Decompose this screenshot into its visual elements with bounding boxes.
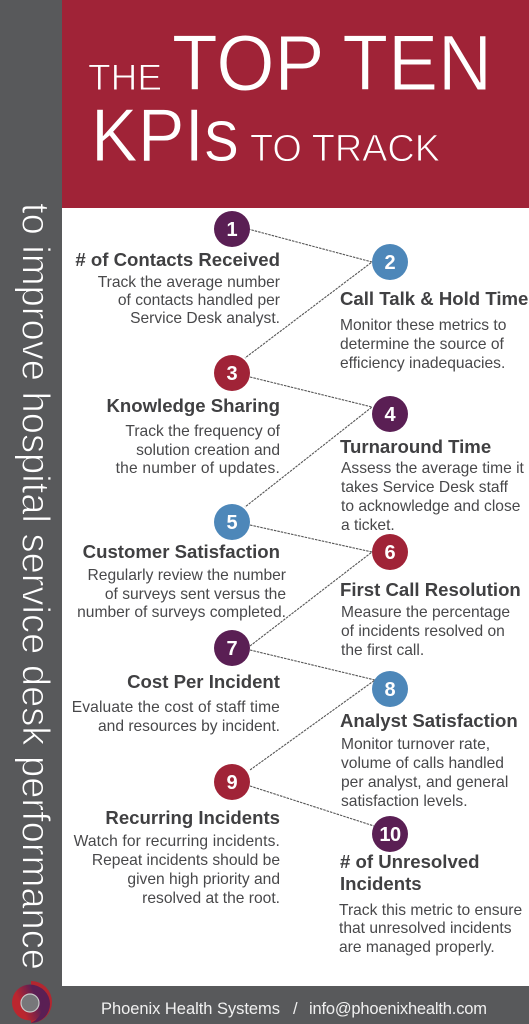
text 3 <box>116 423 281 477</box>
badge 2: 2 <box>384 252 396 274</box>
text 1: of contacts handled per <box>118 292 280 309</box>
text 2 <box>340 317 507 372</box>
footer text <box>101 1000 487 1018</box>
text 2: determine the source of <box>340 336 504 353</box>
heading 9: Recurring Incidents <box>105 807 280 828</box>
text 2: Monitor these metrics to <box>340 317 507 334</box>
badge 9: 9 <box>226 772 238 794</box>
heading 10: Incidents <box>340 873 422 894</box>
text 5: number of surveys completed. <box>77 604 286 621</box>
badge 6 <box>372 534 408 570</box>
badge 4 <box>372 396 408 432</box>
heading 3: Knowledge Sharing <box>106 395 280 416</box>
text 7 <box>72 699 280 735</box>
title banner <box>62 0 529 208</box>
badge 10: 10 <box>379 824 401 846</box>
text 10: are managed properly. <box>339 939 495 956</box>
text 5: of surveys sent versus the <box>105 586 286 603</box>
badge 6: 6 <box>384 542 396 564</box>
badge 5 <box>214 504 250 540</box>
text 7: Evaluate the cost of staff time <box>72 699 280 716</box>
text 10: Track this metric to ensure <box>339 902 522 919</box>
KPI 4 <box>340 396 525 534</box>
heading 1: # of Contacts Received <box>75 249 280 270</box>
KPI 2 <box>340 244 528 372</box>
text 6: Measure the percentage <box>341 604 510 621</box>
text 9: given high priority and <box>127 871 280 888</box>
heading 10 <box>340 851 480 894</box>
sidebar subtitle: to improve hospital service desk performance <box>14 203 56 970</box>
title banner: TO TRACK <box>250 128 440 170</box>
left sidebar <box>0 0 62 1024</box>
KPI 3 <box>106 355 281 477</box>
footer bar <box>0 986 529 1024</box>
heading 4: Turnaround Time <box>340 436 491 457</box>
heading 2: Call Talk & Hold Time <box>340 288 528 309</box>
text 4: takes Service Desk staff <box>341 479 509 496</box>
KPI 8 <box>340 671 518 810</box>
text 6: of incidents resolved on <box>341 623 505 640</box>
text 4 <box>341 460 525 534</box>
text 3: the number of updates. <box>116 460 280 477</box>
footer text: info@phoenixhealth.com <box>309 1000 487 1018</box>
KPI 1 <box>75 211 280 327</box>
badge 7: 7 <box>226 638 238 660</box>
title banner: KPIs <box>91 93 239 177</box>
heading 5: Customer Satisfaction <box>83 541 280 562</box>
text 8 <box>341 736 508 810</box>
badge 8: 8 <box>384 679 396 701</box>
footer text: Phoenix Health Systems <box>101 1000 280 1018</box>
badge 1 <box>214 211 250 247</box>
badge 3: 3 <box>226 363 238 385</box>
text 1 <box>98 274 280 327</box>
text 9 <box>74 833 280 907</box>
heading 7: Cost Per Incident <box>127 671 280 692</box>
badge 10 <box>372 816 408 852</box>
text 10 <box>339 902 522 956</box>
text 8: per analyst, and general <box>341 774 508 791</box>
badge 7 <box>214 630 250 666</box>
badge 2 <box>372 244 408 280</box>
KPI 10 <box>339 816 522 956</box>
badge 4: 4 <box>384 404 396 426</box>
text 10: that unresolved incidents <box>339 920 512 937</box>
badge 1: 1 <box>226 219 238 241</box>
text 9: resolved at the root. <box>142 890 280 907</box>
text 9: Watch for recurring incidents. <box>74 833 280 850</box>
text 3: solution creation and <box>136 442 280 459</box>
heading 8: Analyst Satisfaction <box>340 710 518 731</box>
text 1: Service Desk analyst. <box>130 310 280 327</box>
KPI 7 <box>72 630 280 735</box>
text 1: Track the average number <box>98 274 280 291</box>
footer text: / <box>293 1000 298 1018</box>
KPI 6 <box>340 534 521 659</box>
badge 9 <box>214 764 250 800</box>
heading 6: First Call Resolution <box>340 579 521 600</box>
text 4: to acknowledge and close <box>341 498 520 515</box>
KPI 5 <box>77 504 286 621</box>
heading 10: # of Unresolved <box>340 851 480 872</box>
title banner: TOP TEN <box>172 18 492 107</box>
text 7: and resources by incident. <box>98 718 280 735</box>
text 3: Track the frequency of <box>125 423 281 440</box>
text 8: volume of calls handled <box>341 755 504 772</box>
KPI 9 <box>74 764 280 907</box>
badge 8 <box>372 671 408 707</box>
text 4: a ticket. <box>341 517 395 534</box>
badge 5: 5 <box>226 512 238 534</box>
text 6 <box>341 604 510 659</box>
text 9: Repeat incidents should be <box>92 852 280 869</box>
text 5 <box>77 567 286 621</box>
title banner: THE <box>88 57 162 98</box>
text 8: Monitor turnover rate, <box>341 736 490 753</box>
text 8: satisfaction levels. <box>341 793 468 810</box>
text 5: Regularly review the number <box>88 567 286 584</box>
text 4: Assess the average time it <box>341 460 525 477</box>
text 6: the first call. <box>341 642 424 659</box>
connector lines <box>245 229 375 826</box>
badge 3 <box>214 355 250 391</box>
text 2: efficiency inadequacies. <box>340 355 505 372</box>
icon: Phoenix logo <box>12 981 52 1023</box>
